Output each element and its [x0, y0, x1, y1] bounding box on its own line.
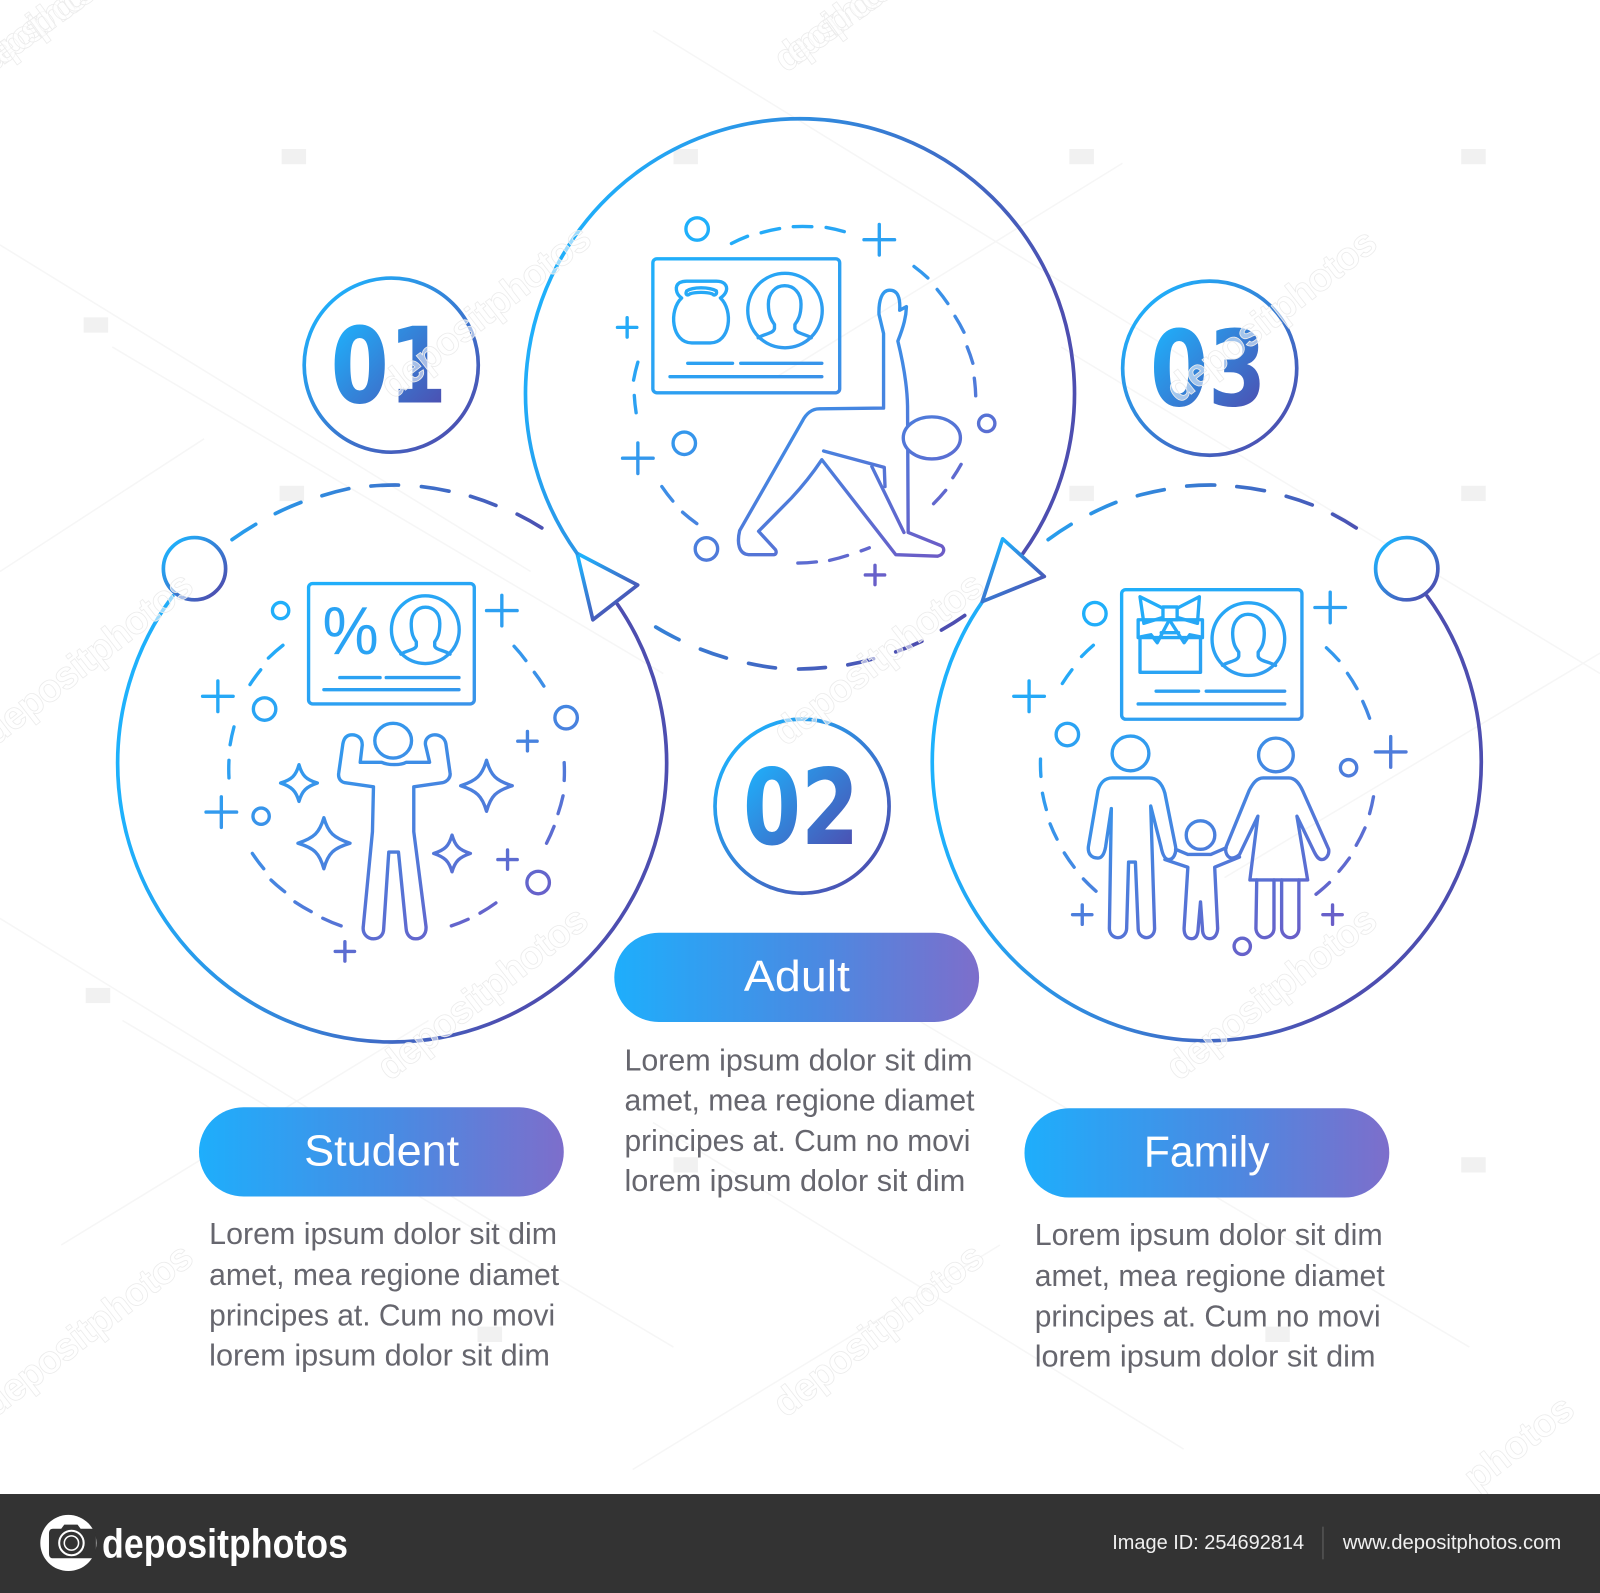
panel: adult — [526, 119, 1074, 1198]
student text block: principes at. Cum no movi — [209, 1300, 555, 1333]
sparkles — [281, 760, 512, 872]
dashed inner ring — [634, 226, 976, 563]
child figure — [1165, 821, 1239, 939]
card — [309, 584, 474, 704]
text: depositphotos — [765, 1235, 992, 1426]
icon: student discount card and athlete — [203, 584, 577, 961]
student text block: lorem ipsum dolor sit dim — [209, 1339, 550, 1372]
plus signs — [617, 224, 895, 585]
card: % — [322, 594, 379, 669]
athlete figure — [339, 723, 450, 939]
family text block: principes at. Cum no movi — [1035, 1301, 1381, 1334]
text: photos — [1456, 1387, 1583, 1499]
text: depositphotos — [369, 898, 596, 1089]
adult label pill — [614, 933, 979, 1022]
mother figure — [1226, 738, 1329, 938]
yoga figure — [738, 290, 960, 556]
card — [653, 259, 840, 393]
number badge 02: 02 — [743, 746, 859, 869]
dashed inner ring — [229, 645, 564, 926]
family dashed arc — [1048, 485, 1356, 540]
start node — [163, 538, 226, 600]
small circles — [253, 602, 577, 894]
adult text block: lorem ipsum dolor sit dim — [624, 1165, 965, 1198]
adult text block: principes at. Cum no movi — [624, 1125, 970, 1158]
text: depositphotos — [1158, 898, 1385, 1089]
text: depositphotos — [1158, 220, 1385, 411]
icon: fitness card and yoga pose — [617, 218, 995, 585]
icon: family card and family figures — [1014, 590, 1406, 954]
family text block: lorem ipsum dolor sit dim — [1035, 1340, 1376, 1373]
depositphotos logo — [40, 1515, 348, 1571]
family text block: amet, mea regione diamet — [1035, 1260, 1385, 1293]
adult dashed arc — [656, 615, 965, 669]
arrowhead — [982, 539, 1044, 602]
website: www.depositphotos.com — [1342, 1532, 1561, 1554]
arrowhead — [577, 553, 638, 620]
student text block — [209, 1218, 560, 1372]
text: depositphotos — [765, 563, 992, 754]
plus signs — [203, 595, 537, 961]
image id: Image ID: 254692814 — [1112, 1532, 1304, 1554]
number badge 02 — [715, 719, 889, 893]
small circles — [673, 218, 995, 560]
adult text block: Lorem ipsum dolor sit dim — [624, 1045, 972, 1078]
end node — [1376, 538, 1438, 600]
number badge 03 — [1123, 281, 1297, 455]
student label pill — [199, 1107, 564, 1197]
depositphotos logo: depositphotos — [102, 1520, 348, 1566]
father figure — [1088, 736, 1176, 938]
adult label pill: Adult — [744, 952, 850, 1001]
number badge 01: 01 — [331, 305, 447, 428]
panel: family — [932, 281, 1481, 1373]
footer bar — [0, 1494, 1600, 1593]
adult text block — [624, 1045, 975, 1198]
small circles — [1056, 602, 1357, 954]
student dashed arc — [232, 485, 542, 540]
plus signs — [1014, 592, 1406, 924]
student text block: amet, mea regione diamet — [209, 1259, 560, 1292]
family label pill: Family — [1144, 1127, 1269, 1176]
student circle arc — [118, 596, 667, 1042]
student text block: Lorem ipsum dolor sit dim — [209, 1218, 557, 1251]
adult circle arc — [526, 119, 1074, 554]
number badge 01 — [304, 278, 478, 452]
family circle arc — [932, 596, 1481, 1041]
family text block: Lorem ipsum dolor sit dim — [1035, 1219, 1383, 1252]
adult text block: amet, mea regione diamet — [624, 1084, 975, 1117]
family label pill — [1024, 1108, 1389, 1198]
card — [1122, 590, 1302, 719]
family text block — [1035, 1219, 1385, 1373]
number badge 03: 03 — [1150, 308, 1266, 431]
dashed inner ring — [1040, 645, 1373, 894]
panel: student — [118, 278, 667, 1372]
student label pill: Student — [304, 1126, 459, 1175]
text: depositphotos — [372, 216, 599, 407]
